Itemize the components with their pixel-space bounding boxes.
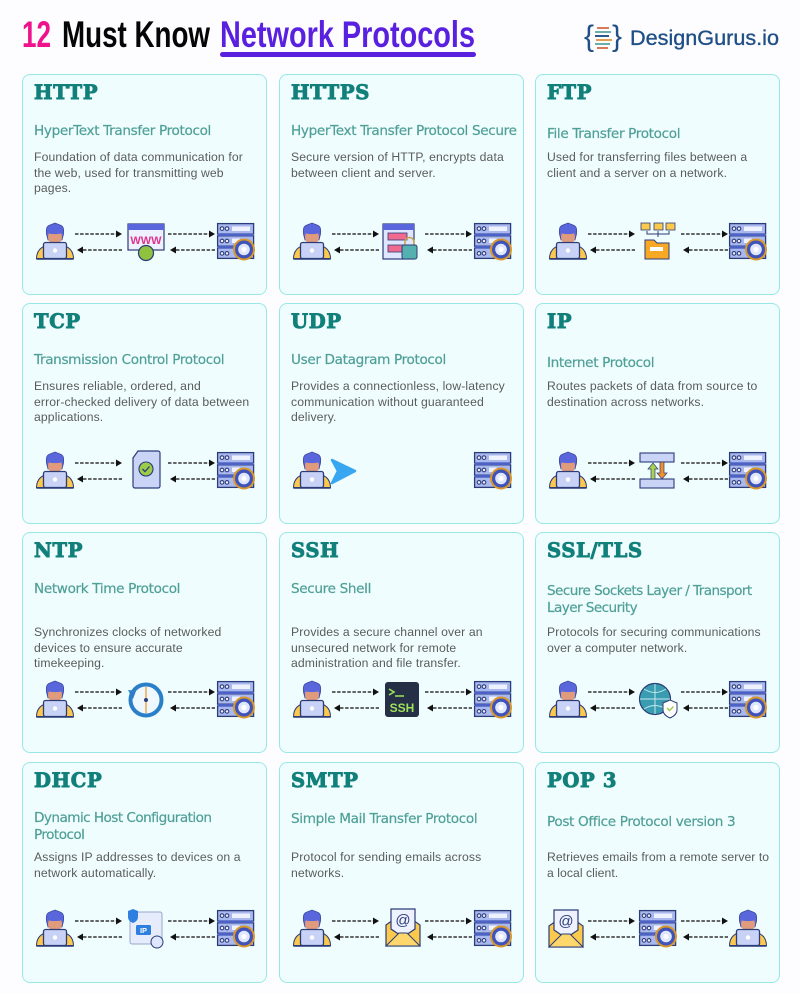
icon: server — [730, 224, 766, 260]
heading: SSL/TLS: SSL/TLS — [547, 539, 643, 562]
icon: server — [730, 453, 766, 488]
description: destination across networks. — [547, 394, 704, 408]
description — [547, 379, 757, 408]
description: networks. — [291, 866, 344, 880]
icon: client — [730, 910, 766, 947]
icon: client — [36, 223, 74, 260]
description: Provides a secure channel over an — [291, 625, 483, 639]
description: the web, used for transmitting web — [34, 166, 224, 180]
description: a local client. — [547, 866, 618, 880]
subtitle: HyperText Transfer Protocol Secure — [291, 123, 517, 139]
arrows: client and document — [75, 460, 122, 482]
heading: HTTP: HTTP — [34, 81, 98, 104]
description: network automatically. — [34, 866, 156, 880]
subtitle: Protocol — [34, 826, 84, 842]
description — [34, 625, 221, 670]
diagram — [549, 452, 767, 490]
description: Assigns IP addresses to devices on a — [34, 850, 241, 864]
heading: FTP: FTP — [547, 81, 592, 104]
description: error-checked delivery of data between — [34, 394, 249, 408]
icon: routing — [640, 453, 674, 488]
subtitle: Post Office Protocol version 3 — [547, 814, 735, 830]
subtitle — [547, 583, 752, 616]
description — [291, 850, 481, 880]
heading: SSH: SSH — [291, 539, 339, 562]
arrows: document and server — [168, 460, 215, 482]
subtitle: Secure Shell — [291, 581, 371, 597]
description: Protocol for sending emails across — [291, 850, 481, 864]
description: Routes packets of data from source to — [547, 379, 757, 393]
icon: clock — [128, 684, 162, 716]
description — [547, 625, 761, 654]
description — [291, 625, 483, 670]
arrows: client and router — [588, 460, 635, 482]
panel: SSL/TLS — [535, 532, 780, 753]
icon: server — [218, 682, 254, 718]
diagram — [36, 450, 255, 490]
icon: server — [218, 911, 254, 946]
arrows: globe and server — [681, 688, 728, 712]
description: Protocols for securing communications — [547, 625, 761, 639]
icon: server — [475, 224, 511, 260]
icon: server — [475, 682, 511, 718]
panel: SSH — [279, 532, 524, 753]
diagram — [293, 680, 512, 718]
diagram — [293, 452, 512, 490]
panel: FTP — [535, 74, 780, 295]
description: between client and server. — [291, 166, 436, 180]
panel: UDP — [279, 303, 524, 524]
arrows: client and mail — [332, 918, 379, 940]
icon: client — [36, 681, 74, 718]
subtitle: User Datagram Protocol — [291, 352, 446, 368]
arrows: secure page and server — [425, 230, 472, 254]
icon: client — [294, 223, 330, 260]
icon: folder tree — [641, 223, 675, 259]
panel: POP 3 — [535, 762, 780, 983]
icon: IP configuration — [128, 909, 163, 948]
diagram — [36, 909, 255, 948]
arrows: web and server — [168, 230, 215, 254]
icon: globe and shield — [640, 684, 677, 718]
description — [291, 379, 505, 424]
description — [34, 379, 249, 424]
arrows: client and folder — [588, 230, 635, 254]
arrows: client and web — [75, 230, 122, 254]
description: Ensures reliable, ordered, and — [34, 379, 201, 393]
title: 12 — [22, 14, 51, 55]
icon: IP configuration: IP — [140, 926, 147, 935]
panel: SMTP — [279, 762, 524, 983]
description: delivery. — [291, 410, 337, 424]
arrows: client and terminal — [332, 688, 379, 712]
diagram — [293, 222, 512, 260]
icon: client — [294, 681, 330, 718]
description — [34, 850, 241, 880]
panel: HTTP — [22, 74, 267, 295]
description — [547, 150, 748, 180]
subtitle: Dynamic Host Configuration — [34, 810, 211, 826]
panel: IP — [535, 303, 780, 524]
description — [291, 150, 504, 180]
description: over a computer network. — [547, 640, 687, 654]
arrows: client and clock — [75, 688, 122, 712]
icon: server — [218, 224, 254, 260]
diagram — [549, 680, 767, 718]
diagram — [548, 909, 767, 948]
logo: DesignGurus.io: DesignGurus.io — [630, 27, 779, 50]
diagram — [293, 908, 512, 948]
subtitle: Secure Sockets Layer / Transport — [547, 583, 752, 599]
arrows: mail and server — [425, 918, 472, 940]
description: pages. — [34, 181, 71, 195]
title — [22, 14, 476, 57]
description — [34, 150, 243, 195]
icon: secure web page — [383, 224, 417, 259]
subtitle: File Transfer Protocol — [547, 126, 680, 142]
heading: SMTP: SMTP — [291, 769, 359, 792]
heading: HTTPS: HTTPS — [291, 81, 370, 104]
description: devices to ensure accurate — [34, 640, 183, 654]
arrows: client and globe — [588, 688, 635, 712]
arrows: terminal and server — [425, 688, 472, 712]
diagram — [36, 680, 255, 718]
logo: DesignGurus.io: { — [584, 20, 594, 53]
icon: client — [36, 452, 74, 489]
title: Must Know — [62, 14, 210, 55]
panel: NTP — [22, 532, 267, 753]
description: timekeeping. — [34, 656, 105, 670]
icon: client — [550, 223, 586, 260]
icon: client — [550, 452, 586, 489]
icon: server — [475, 453, 511, 488]
subtitle: Network Time Protocol — [34, 581, 180, 597]
description: communication without guaranteed — [291, 394, 484, 408]
subtitle: Transmission Control Protocol — [34, 352, 224, 368]
arrows: client and secure page — [332, 230, 379, 254]
heading: DHCP: DHCP — [34, 769, 102, 792]
icon: server — [730, 682, 766, 718]
arrows: folder and server — [681, 230, 728, 254]
arrows: client and IP config — [75, 918, 122, 940]
icon: SSH terminal — [385, 682, 419, 717]
heading: NTP: NTP — [34, 539, 83, 562]
subtitle — [34, 810, 211, 842]
arrows: router and server — [681, 460, 728, 482]
description: applications. — [34, 410, 103, 424]
subtitle: HyperText Transfer Protocol — [34, 123, 211, 139]
description: client and a server on a network. — [547, 166, 727, 180]
icon: client — [294, 910, 330, 947]
icon: client — [550, 681, 586, 718]
description: Secure version of HTTP, encrypts data — [291, 150, 504, 164]
heading: IP: IP — [547, 310, 572, 333]
panel: TCP — [22, 303, 267, 524]
arrows: mail and server — [588, 918, 635, 940]
panel: DHCP — [22, 762, 267, 983]
arrows: clock and server — [168, 688, 215, 712]
panel: HTTPS — [279, 74, 524, 295]
heading: UDP: UDP — [291, 310, 342, 333]
subtitle: Internet Protocol — [547, 355, 654, 371]
description: Foundation of data communication for — [34, 150, 243, 164]
description: Synchronizes clocks of networked — [34, 625, 221, 639]
logo: DesignGurus.io — [584, 20, 779, 53]
description: administration and file transfer. — [291, 656, 461, 670]
subtitle: Layer Security — [547, 600, 637, 616]
icon: server — [640, 911, 676, 946]
diagram — [36, 222, 255, 262]
icon: web page — [128, 224, 164, 260]
subtitle: Simple Mail Transfer Protocol — [291, 811, 477, 827]
description — [547, 850, 769, 880]
icon: server — [218, 453, 254, 488]
icon: envelope — [549, 910, 583, 947]
icon: envelope — [386, 909, 420, 946]
arrows: IP config and server — [168, 918, 215, 940]
heading: TCP: TCP — [34, 310, 81, 333]
icon: client — [294, 452, 330, 489]
icon: send — [332, 460, 355, 483]
arrows: server and client — [681, 918, 728, 940]
icon: checked document — [133, 451, 160, 488]
description: unsecured network for remote — [291, 640, 456, 654]
description: Provides a connectionless, low-latency — [291, 379, 505, 393]
icon: server — [475, 911, 511, 946]
description: Used for transferring files between a — [547, 150, 747, 164]
diagram — [549, 222, 767, 260]
icon: client — [36, 910, 74, 947]
description: Retrieves emails from a remote server to — [547, 850, 769, 864]
icon: web page: WWW — [130, 235, 162, 247]
logo: DesignGurus.io: } — [612, 20, 622, 53]
heading: POP 3: POP 3 — [547, 769, 617, 792]
icon: SSH terminal: SSH — [390, 701, 414, 715]
